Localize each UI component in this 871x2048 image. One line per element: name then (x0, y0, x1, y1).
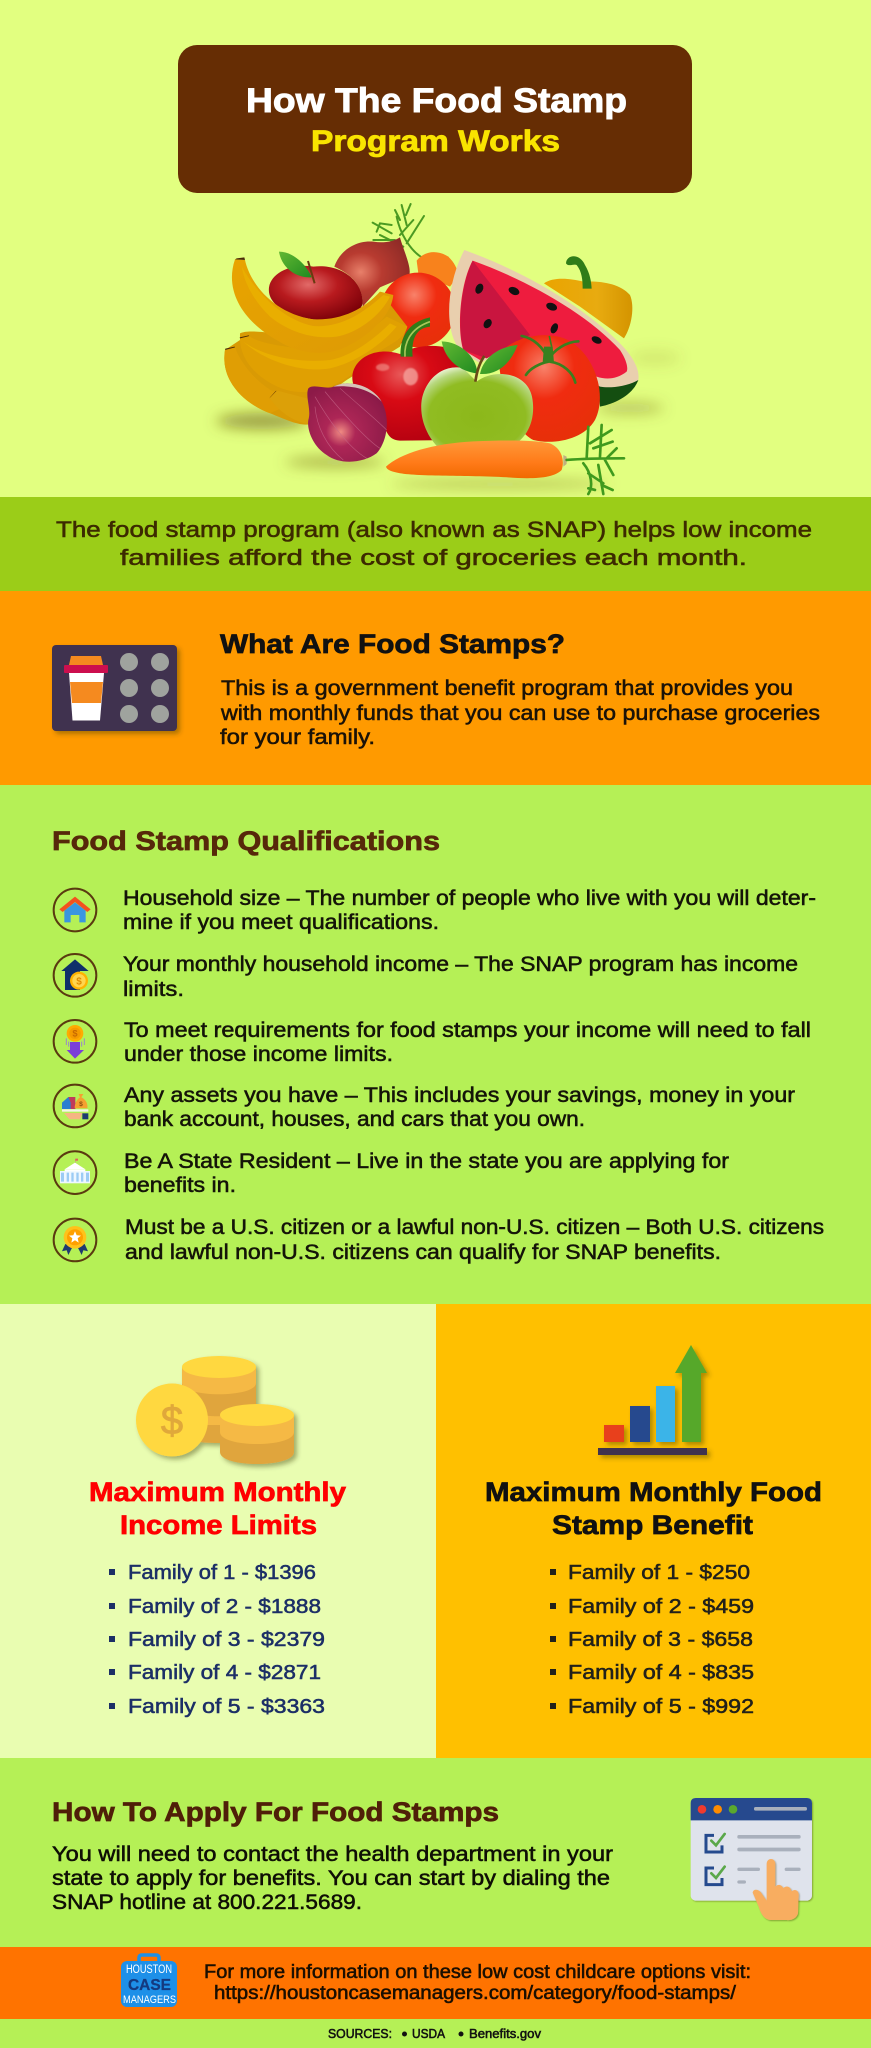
carrot (386, 440, 567, 478)
heading: Maximum Monthly Food (485, 1477, 822, 1507)
logo: Houston Case Managers: CASE (128, 1977, 171, 1994)
icon: assets on hand: $ (79, 1101, 83, 1108)
band: intro statement (0, 497, 871, 591)
text: benefits in. (124, 1173, 236, 1197)
text (124, 1018, 811, 1066)
intro text line 1: The food stamp program (also known as SNAP) helps low income (56, 517, 812, 542)
text: Must be a U.S. citizen or a lawful non-U.S. citizen – Both U.S. citizens (125, 1215, 824, 1239)
heading: Stamp Benefit (552, 1510, 753, 1540)
yellow pepper (544, 256, 632, 338)
back onion (334, 237, 410, 307)
sources text: SOURCES: (328, 2026, 392, 2041)
back tomato (381, 273, 455, 347)
icon: coin and down arrow: $ (72, 1029, 78, 1039)
text: Be A State Resident – Live in the state you are applying for (124, 1149, 729, 1173)
qualification 3 (54, 1018, 811, 1066)
panel: maximum monthly food stamp benefit (436, 1304, 871, 1758)
call to action text (204, 1962, 751, 2004)
qualification 1 (54, 886, 816, 934)
panel: qualifications (0, 785, 871, 1304)
icon: house (54, 889, 96, 931)
icon: coins: $ (161, 1399, 183, 1443)
text: To meet requirements for food stamps your income will need to fall (124, 1018, 811, 1042)
icon: coin and down arrow (54, 1020, 96, 1063)
carrot greens (back) (373, 204, 424, 257)
benefit list (550, 1561, 754, 1718)
bananas (224, 257, 407, 425)
icon: medal (54, 1219, 96, 1261)
text: Household size – The number of people who live with you will deter- (123, 886, 816, 910)
panel: footer call to action (0, 1947, 871, 2019)
body text (220, 676, 820, 749)
ground shadows (216, 350, 681, 489)
body text: You will need to contact the health department in your (52, 1842, 613, 1866)
heading: Food Stamp Qualifications (52, 826, 440, 856)
benefit list: Family of 3 - $658 (568, 1628, 753, 1651)
text: and lawful non-U.S. citizens can qualify for SNAP benefits. (125, 1240, 721, 1264)
icon: income arrow and coin: $ (76, 976, 82, 987)
sources text (328, 2026, 542, 2041)
text: mine if you meet qualifications. (123, 910, 439, 934)
call to action text: For more information on these low cost childcare options visit: (204, 1962, 751, 1983)
title box (178, 45, 692, 193)
icon: EBT card with cup (52, 645, 177, 731)
text (123, 952, 798, 1001)
heading: What Are Food Stamps? (220, 629, 565, 659)
benefit list: Family of 1 - $250 (568, 1561, 750, 1584)
background: top lime (0, 0, 871, 497)
text: under those income limits. (124, 1042, 393, 1066)
intro text line 2: families afford the cost of groceries each month. (120, 545, 747, 570)
red pepper (352, 317, 460, 441)
benefit list: Family of 5 - $992 (568, 1695, 754, 1718)
body text: This is a government benefit program that provides you (221, 676, 793, 700)
body text: state to apply for benefits. You can start by dialing the (52, 1866, 610, 1890)
green apple (421, 341, 533, 449)
logo: Houston Case Managers: HOUSTON (126, 1964, 172, 1976)
front tomato, green apple, carrot (386, 335, 624, 494)
heading: How To Apply For Food Stamps (52, 1797, 499, 1827)
logo: Houston Case Managers (121, 1955, 177, 2007)
icon: state building (54, 1151, 96, 1194)
income list: Family of 4 - $2871 (128, 1661, 321, 1684)
heading (485, 1477, 822, 1540)
icon: checklist window with pointing hand (691, 1798, 812, 1920)
text: Any assets you have – This includes your savings, money in your (124, 1083, 795, 1107)
body text: with monthly funds that you can use to purchase groceries (220, 701, 820, 725)
title line 1: How The Food Stamp (246, 82, 627, 120)
qualification 4 (54, 1083, 795, 1131)
sources text: Benefits.gov (469, 2026, 542, 2041)
body text: for your family. (220, 725, 375, 749)
watermelon (449, 250, 639, 407)
qualification 6 (54, 1215, 824, 1264)
red apple (269, 252, 363, 320)
text (123, 886, 816, 934)
red onion (307, 383, 387, 462)
income list: Family of 5 - $3363 (128, 1695, 325, 1718)
benefit list: Family of 2 - $459 (568, 1595, 754, 1618)
heading: Income Limits (120, 1510, 317, 1540)
income list: Family of 2 - $1888 (128, 1595, 321, 1618)
front tomato (498, 335, 600, 442)
benefit list: Family of 4 - $835 (568, 1661, 754, 1684)
icon: income arrow and coin (54, 954, 96, 997)
icon: coins (136, 1356, 294, 1464)
income list (109, 1561, 325, 1718)
qualification 5 (54, 1149, 729, 1197)
sources text: USDA (412, 2026, 445, 2041)
text (125, 1215, 824, 1264)
text: Your monthly household income – The SNAP program has income (123, 952, 798, 976)
icon: rising bar chart (598, 1345, 707, 1455)
text (124, 1149, 729, 1197)
panel: what are food stamps (0, 591, 871, 785)
back carrot, tomato, pepper, watermelon (381, 250, 639, 407)
icon: assets on hand (54, 1085, 96, 1127)
text: bank account, houses, and cars that you own. (124, 1107, 585, 1131)
income list: Family of 3 - $2379 (128, 1628, 325, 1651)
panel: how to apply (0, 1758, 871, 1947)
heading: Maximum Monthly (89, 1477, 346, 1507)
body text: SNAP hotline at 800.221.5689. (52, 1890, 362, 1914)
call to action text: https://houstoncasemanagers.com/category/food-stamps/ (214, 1983, 737, 2004)
income list: Family of 1 - $1396 (128, 1561, 316, 1584)
panel: sources (0, 2019, 871, 2048)
illustration: pile of fruit and vegetables (216, 204, 681, 494)
back parts, left coordinates (269, 204, 424, 320)
back carrot (417, 252, 458, 287)
body text (52, 1842, 613, 1914)
heading (89, 1477, 346, 1540)
logo: Houston Case Managers: MANAGERS (123, 1994, 176, 2006)
title line 2: Program Works (311, 125, 560, 158)
text (124, 1083, 795, 1131)
qualification 2 (54, 952, 798, 1001)
panel: maximum monthly income limits (0, 1304, 436, 1758)
carrot greens (567, 425, 624, 494)
text: limits. (123, 977, 184, 1001)
